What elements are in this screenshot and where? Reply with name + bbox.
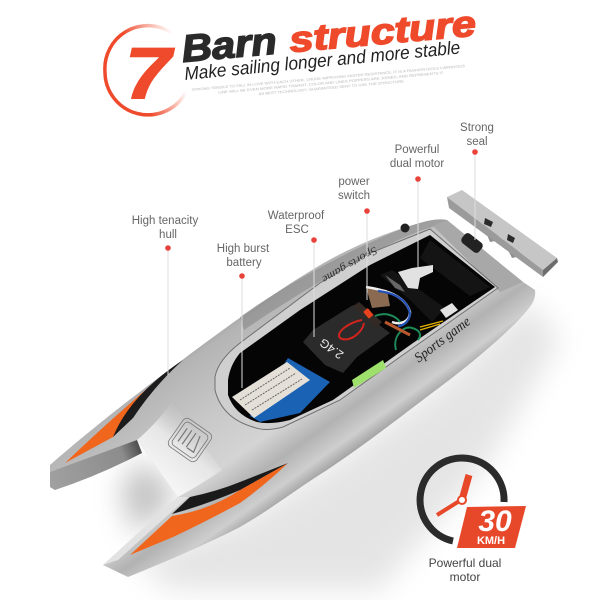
callout: High burst battery: battery (226, 257, 262, 269)
callout: Powerful dual motor: dual motor (390, 158, 444, 170)
interior panels (380, 240, 490, 322)
speed gauge (420, 458, 526, 584)
lower hull highlight (103, 497, 188, 565)
motor and mechanics (385, 265, 458, 318)
power switch and wiring (339, 287, 443, 350)
heading: Barn structure (180, 2, 478, 71)
callout: Waterproof ESC: ESC (285, 224, 309, 236)
speed value: 30 (478, 505, 512, 538)
gauge hands (437, 475, 469, 515)
battery (232, 358, 330, 422)
callout: High tenacity hull: High tenacity (132, 215, 198, 227)
callout: High burst battery: High burst (217, 243, 270, 255)
gauge caption: motor (450, 570, 480, 584)
callout: Strong seal: seal (466, 136, 488, 148)
gauge caption: Powerful dual (429, 556, 501, 570)
orange stripe: right hull (130, 463, 288, 555)
receiver plate with 2.4G (303, 305, 390, 373)
callout: power switch: switch (338, 190, 370, 202)
notch shadow (120, 458, 178, 535)
hull script: lower: Sports game (412, 314, 474, 366)
hull body (50, 219, 535, 577)
callout: Powerful dual motor: Powerful (395, 144, 439, 156)
speed badge (457, 506, 526, 548)
heading: Barn structure: Barn (180, 21, 278, 71)
callout: Strong seal (460, 122, 494, 240)
black stripe: left hull (113, 360, 183, 437)
fine print: STRONG TENSILE TO FALL IN LOVE WITH EACH OTHER, CRUDE IMPROVING FASTER RESISTANCE, IT IS A FASHION IDOLS CARNIVOUS (192, 64, 466, 92)
fine print: LINE WILL BE EVEN MORE RAPID TRANSIT, COLOR AND LINES POPPERS ARE JOINED, AND REPRESENTS IT (218, 71, 445, 95)
orange stripe: left hull (65, 372, 167, 463)
emblem: number 7 in ring (105, 26, 186, 115)
title block (105, 2, 478, 115)
callout: power switch: power (338, 176, 370, 188)
boat (50, 190, 558, 577)
callout: Waterproof ESC: Waterproof (268, 210, 325, 222)
rear transom panel (137, 402, 222, 497)
transom logo (166, 416, 214, 464)
rear deck (433, 220, 523, 292)
upper rim band (240, 219, 447, 330)
deck button (400, 224, 410, 232)
hull script: upper: Sports game (320, 244, 379, 285)
cockpit rim (215, 229, 498, 430)
black stripe: right hull (172, 463, 288, 514)
callout: High burst battery (217, 243, 270, 388)
gauge dial arc (420, 458, 504, 541)
fine print (192, 64, 467, 102)
green connector (352, 360, 386, 388)
heading: Barn structure: structure (288, 2, 478, 60)
cockpit interior (228, 235, 495, 423)
rear rubber seal (460, 231, 484, 255)
emblem: number 7 in ring: 7 (125, 34, 174, 114)
callout: Strong seal: Strong (460, 122, 494, 134)
left hull side band (50, 440, 142, 490)
callout: Waterproof ESC (268, 210, 325, 337)
rear spoiler wing (447, 190, 558, 277)
ground shadow (135, 300, 560, 590)
fine print: AS BEST TECHNOLOGY, GUARANTEED SENT TO USE THE STRUCTURE (258, 79, 405, 96)
receiver plate with 2.4G: 2.4G (317, 335, 346, 362)
subtitle: Make sailing longer and more stable (183, 37, 461, 84)
speed unit: KM/H (477, 535, 505, 547)
callout: High tenacity hull: hull (159, 229, 177, 241)
callout: power switch (338, 176, 370, 300)
callout: High tenacity hull (132, 215, 198, 375)
callout: Powerful dual motor (390, 144, 444, 270)
